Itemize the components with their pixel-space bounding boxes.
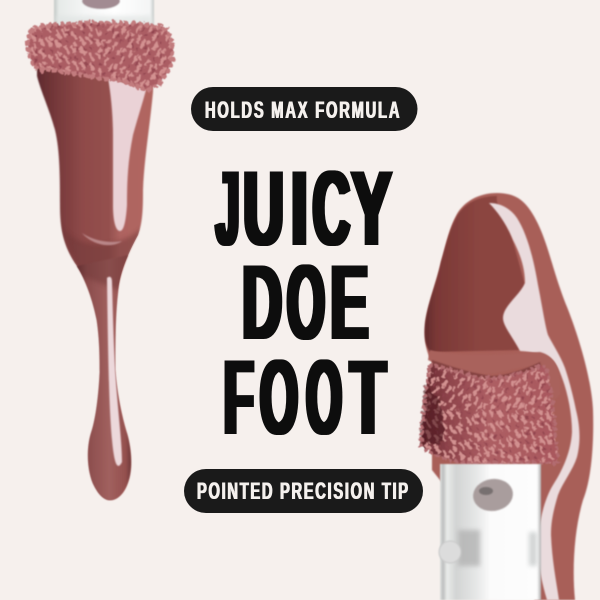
bristle tuft left: [28, 23, 173, 90]
shadow above bristle: [432, 360, 542, 384]
dark face of the gloss: [425, 196, 525, 352]
pill label: HOLDS MAX FORMULA: [205, 97, 401, 124]
title: O: [306, 337, 342, 457]
title: U: [243, 148, 284, 268]
glass tube bottom: [439, 464, 541, 600]
gloss highlight upper: [108, 78, 146, 231]
pill: holds max formula: [191, 87, 418, 131]
title: J: [216, 148, 239, 268]
title: T: [350, 337, 386, 457]
shadow band: [458, 530, 480, 566]
title: I: [291, 148, 308, 268]
stem and drop shading: [77, 255, 131, 500]
oval dark spot: [479, 487, 493, 495]
pill: pointed precision tip: [184, 469, 423, 513]
lip of gloss over bristle: [428, 350, 560, 402]
glass tube top: [54, 0, 154, 28]
bowl shadow: [62, 228, 140, 290]
tube oval window: [471, 476, 515, 514]
title: F: [224, 337, 254, 457]
title: E: [330, 242, 368, 362]
right glass reflection: [529, 532, 537, 566]
right applicator: [420, 193, 593, 600]
title: O: [287, 242, 325, 362]
pill label: POINTED PRECISION TIP: [197, 478, 410, 505]
gloss highlight stem: [107, 277, 122, 466]
title: C: [313, 148, 350, 268]
gloss arc: [82, 233, 122, 245]
title: Y: [351, 148, 392, 268]
lip gloss body: [37, 55, 153, 500]
bristle tuft right: [420, 365, 558, 464]
lip gloss body: [425, 193, 593, 600]
title: D: [242, 242, 282, 362]
title: [216, 148, 392, 457]
left applicator: [28, 0, 173, 500]
title: O: [260, 337, 298, 457]
gloss highlight: [489, 203, 580, 600]
air bubbles: [439, 541, 461, 563]
